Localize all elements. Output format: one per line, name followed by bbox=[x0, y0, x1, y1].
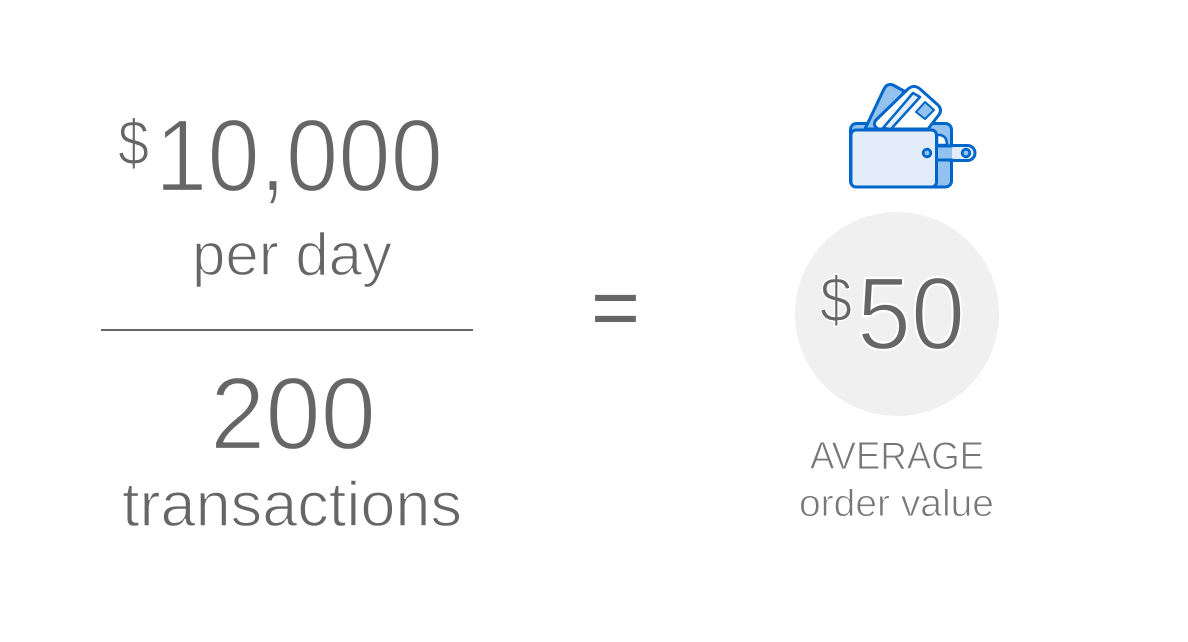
back card bbox=[865, 84, 904, 129]
numerator: daily revenue bbox=[118, 98, 443, 288]
icon: wallet with cards bbox=[850, 84, 975, 187]
dollar sign: $ bbox=[118, 107, 149, 179]
denominator: transactions bbox=[122, 356, 462, 540]
result dollar sign: $ bbox=[820, 264, 852, 336]
clasp bar bbox=[937, 146, 952, 160]
clasp button bbox=[962, 149, 970, 157]
transaction count: 200 bbox=[210, 356, 376, 471]
wallet front bbox=[851, 130, 936, 187]
front card bbox=[874, 86, 940, 129]
fraction line bbox=[101, 329, 473, 331]
order value label: order value bbox=[799, 483, 994, 525]
average label: AVERAGE bbox=[810, 435, 984, 478]
equals sign: = bbox=[591, 260, 640, 354]
inner pockets bbox=[937, 135, 947, 159]
result circle bbox=[795, 212, 999, 416]
card stripe bbox=[883, 93, 920, 129]
card chip bbox=[916, 102, 934, 119]
front button bbox=[923, 149, 931, 157]
average order amount: 50 bbox=[857, 256, 965, 371]
transactions label: transactions bbox=[122, 470, 462, 540]
clasp edges bbox=[937, 146, 952, 160]
wallet back bbox=[850, 124, 952, 187]
caption bbox=[799, 435, 994, 525]
wallet clasp bbox=[950, 146, 975, 160]
result value bbox=[820, 256, 965, 371]
per day label: per day bbox=[192, 221, 392, 288]
revenue amount: 10,000 bbox=[155, 98, 443, 213]
